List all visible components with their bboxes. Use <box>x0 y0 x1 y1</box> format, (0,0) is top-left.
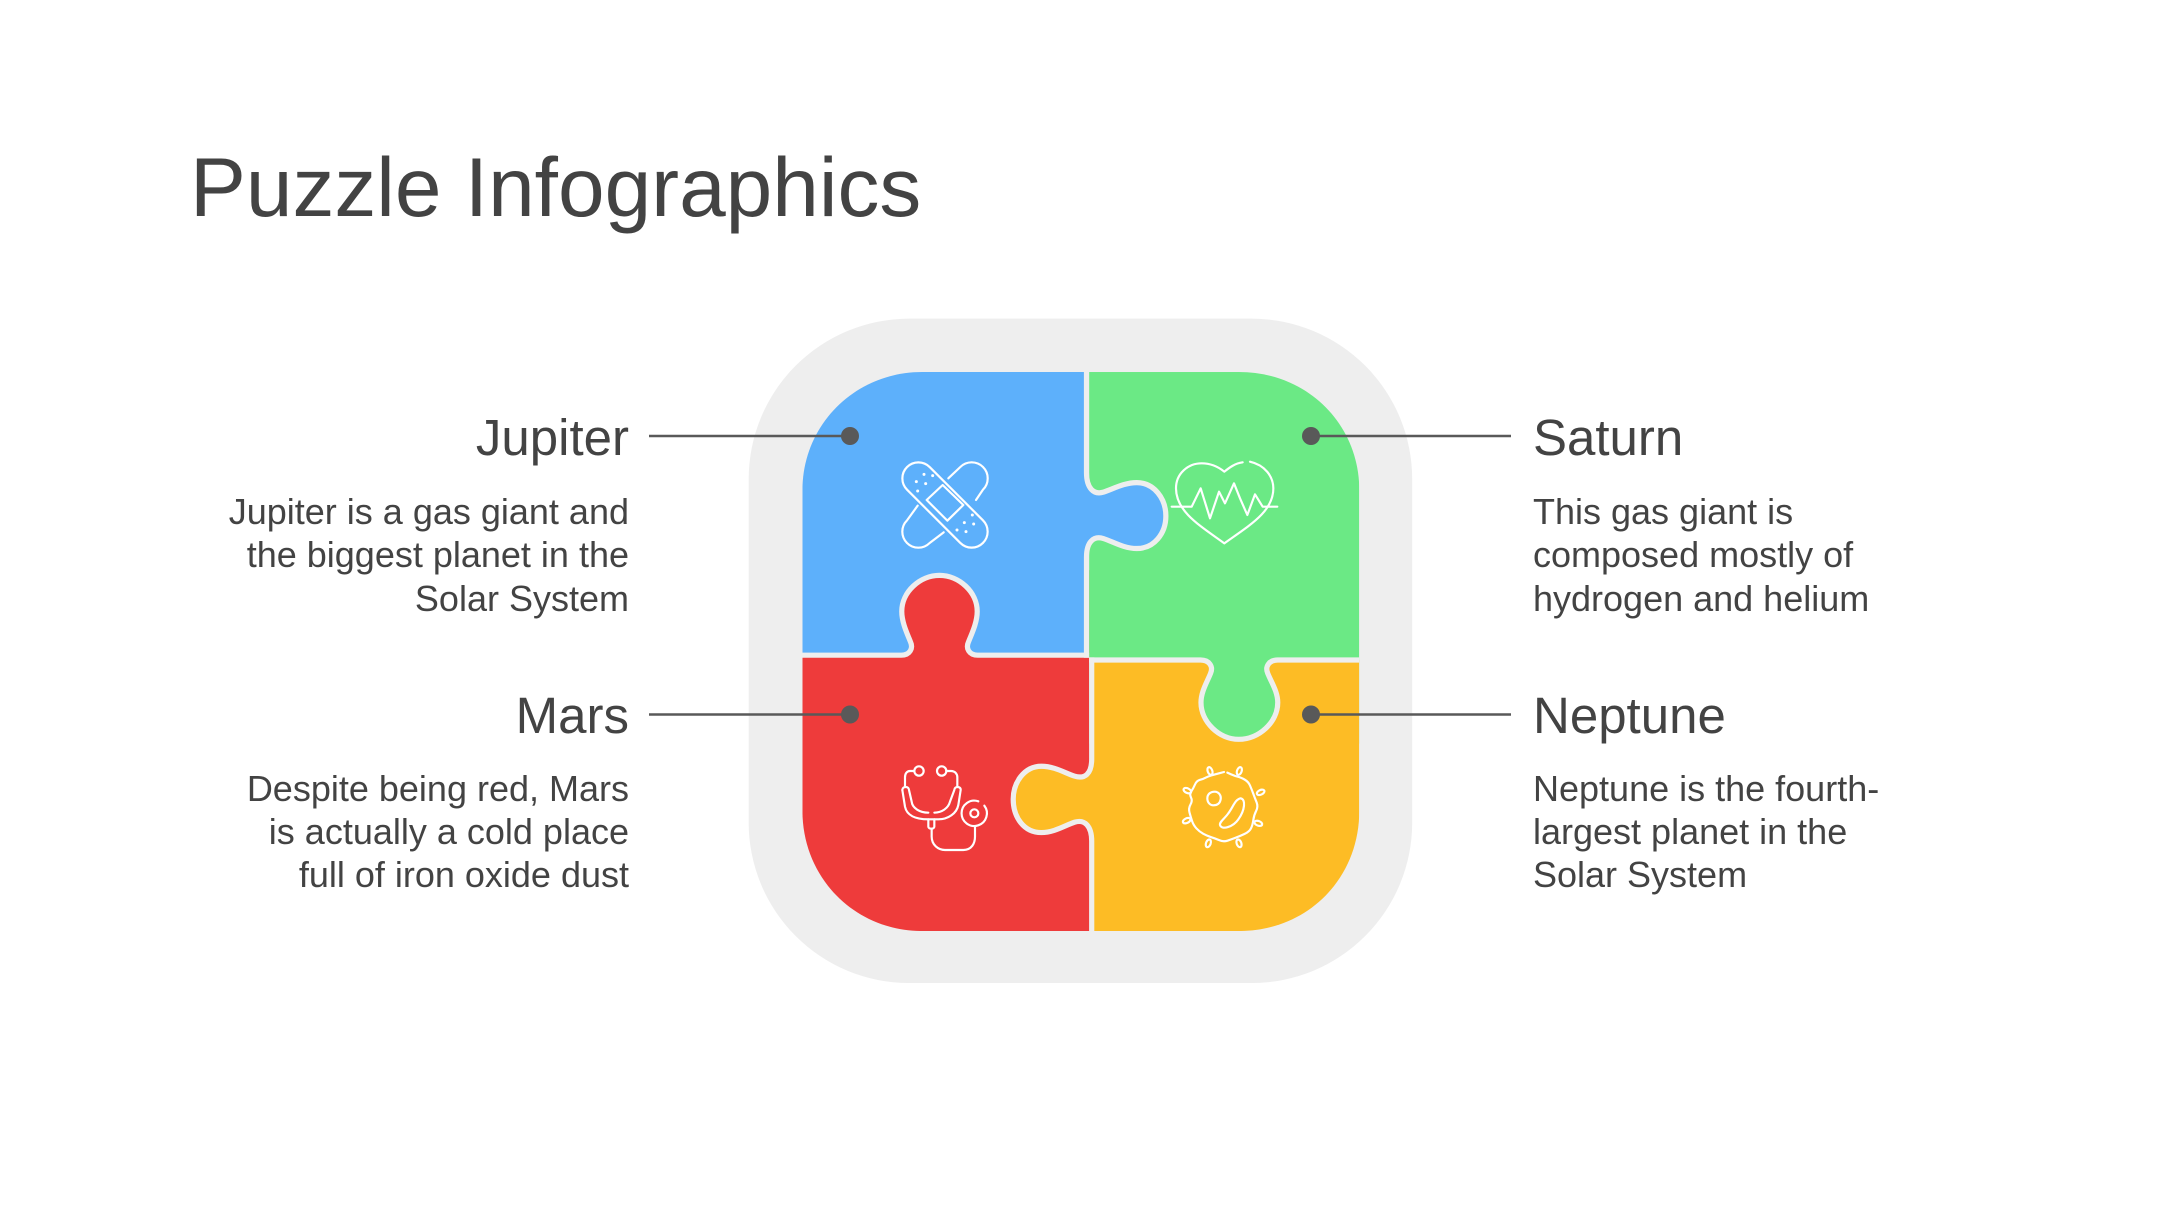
icon: bandage <box>896 456 994 554</box>
title: Puzzle Infographics <box>190 140 921 234</box>
text block: Jupiter <box>229 409 629 619</box>
callout: Jupiter connector <box>649 427 859 445</box>
piece: yellow <box>1013 660 1359 931</box>
text block: Mars: Despite being red, Mars <box>247 768 629 809</box>
piece: red <box>802 570 1092 931</box>
text block: Jupiter: Jupiter is a gas giant and <box>229 491 629 532</box>
text block: Jupiter: Jupiter <box>476 409 629 466</box>
piece seams <box>802 372 1359 931</box>
text block: Mars: full of iron oxide dust <box>299 854 629 895</box>
text block: Neptune: Neptune is the fourth- <box>1533 768 1879 809</box>
text block: Mars <box>247 687 629 895</box>
panel: grey rounded backdrop <box>749 319 1412 983</box>
icon: stethoscope <box>902 766 987 850</box>
text block: Jupiter: Solar System <box>415 578 629 619</box>
text block: Neptune: Solar System <box>1533 854 1747 895</box>
text block: Mars: Mars <box>516 687 629 744</box>
text block: Saturn: composed mostly of <box>1533 534 1854 575</box>
piece: blue <box>802 372 1166 655</box>
text block: Mars: is actually a cold place <box>269 811 629 852</box>
piece: green <box>1089 372 1359 744</box>
callout: Mars connector <box>649 706 859 724</box>
puzzle pieces <box>802 372 1359 931</box>
text block: Saturn: Saturn <box>1533 409 1683 466</box>
puzzle graphic <box>749 319 1412 983</box>
text block: Neptune: Neptune <box>1533 687 1726 744</box>
text block: Neptune <box>1533 687 1879 895</box>
text block: Saturn: This gas giant is <box>1533 491 1793 532</box>
icon: heart with pulse <box>1172 462 1277 543</box>
text block: Neptune: largest planet in the <box>1533 811 1847 852</box>
text block: Saturn: hydrogen and helium <box>1533 578 1869 619</box>
text block: Jupiter: the biggest planet in the <box>247 534 629 575</box>
icon: virus <box>1182 766 1265 848</box>
callout: Neptune connector <box>1302 706 1511 724</box>
callout: Saturn connector <box>1302 427 1511 445</box>
text block: Saturn <box>1533 409 1869 619</box>
